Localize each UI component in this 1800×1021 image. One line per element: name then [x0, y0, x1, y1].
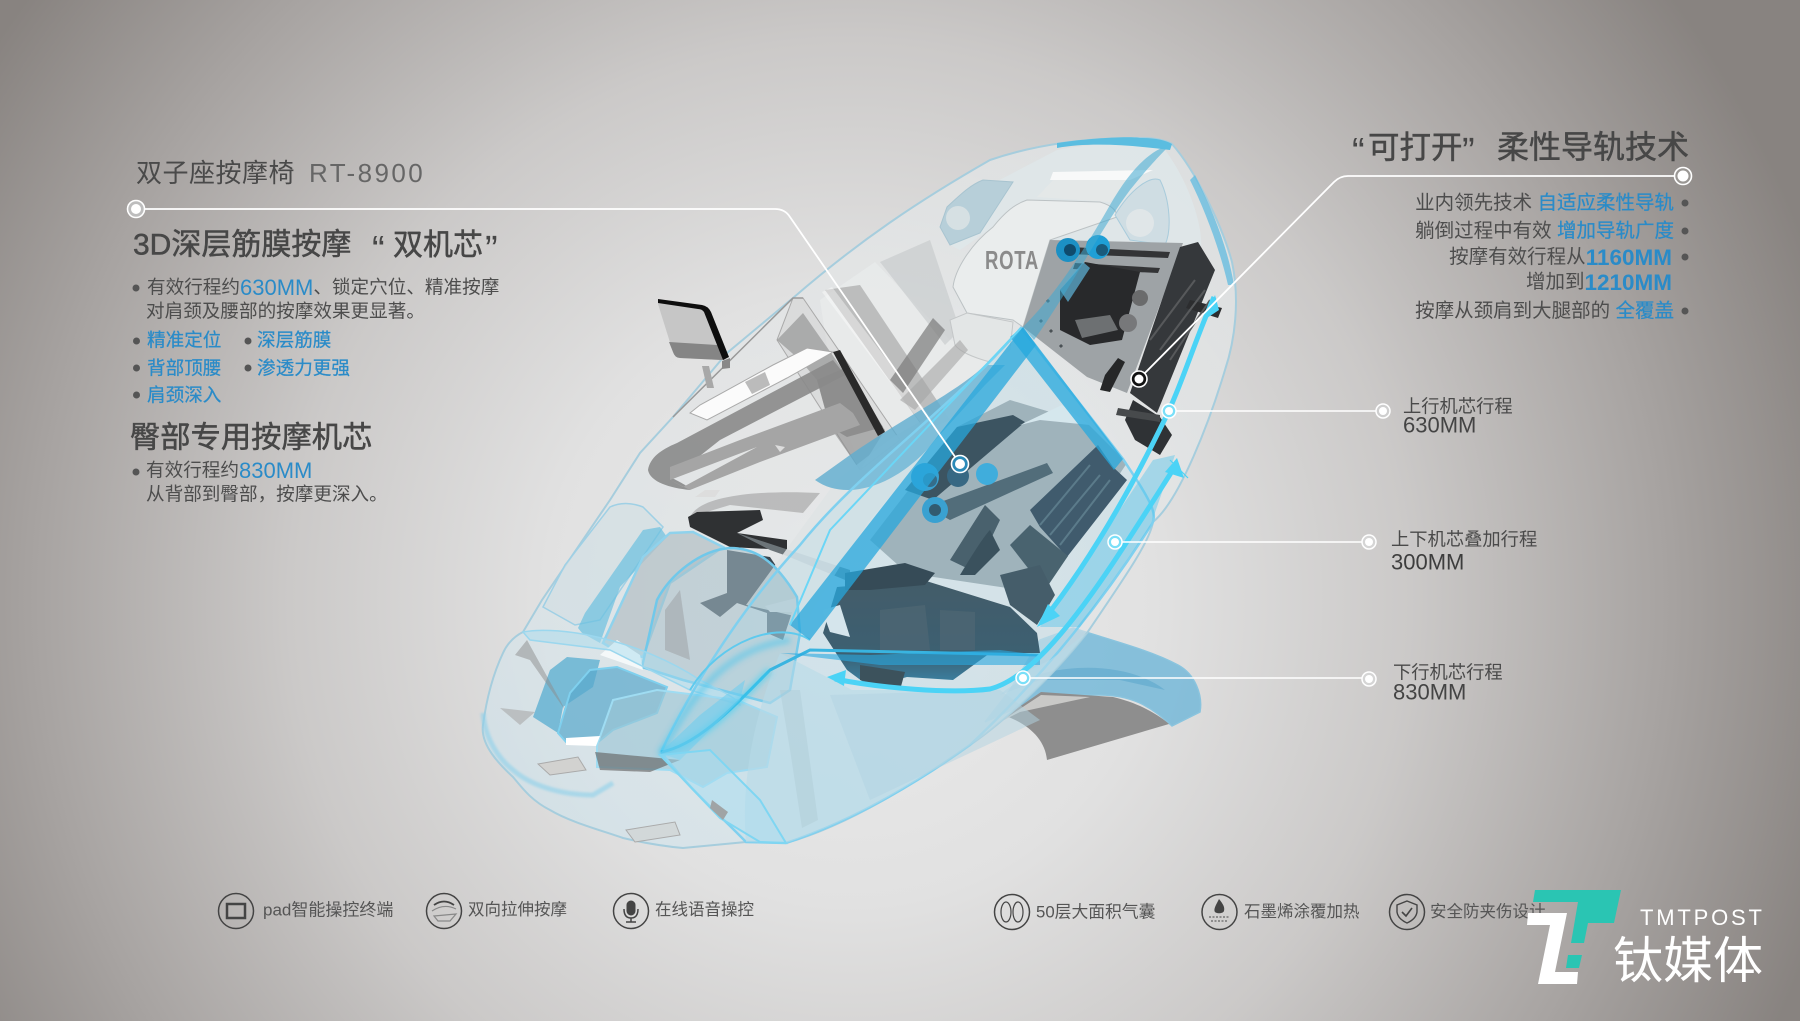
hip core description: 从背部到臀部，按摩更深入。 [146, 484, 388, 504]
right text block: rail features [1415, 192, 1688, 322]
ROTA logo on headrest: ROTA [985, 245, 1039, 275]
right heading: ” [1462, 131, 1475, 173]
massage chair illustration [483, 137, 1236, 848]
right heading [1352, 129, 1689, 173]
feature tags: 背部顶腰 [147, 358, 221, 378]
upper massage heads [1056, 235, 1110, 302]
feature: stretching [426, 894, 567, 928]
callout: overlap travel 300MM [1391, 528, 1537, 574]
icon: microphone [614, 894, 648, 928]
upper massage mechanism [1023, 240, 1222, 455]
seat frame and leg mechanism [688, 492, 850, 640]
icon: stretch chair [426, 894, 462, 928]
feature: graphene heating: 石墨烯涂覆加热 [1244, 902, 1360, 921]
feature tags: 肩颈深入 [147, 384, 221, 406]
watermark logo: 钛媒体 [1613, 933, 1763, 989]
feature tags: 精准定位 [147, 330, 221, 350]
feature tags: 深层筋膜 [257, 330, 331, 350]
feature: voice control [614, 894, 754, 928]
dual core description [132, 274, 499, 322]
left text block: dual core [132, 228, 499, 406]
blue cushion band [815, 365, 1005, 490]
icon: tablet [218, 894, 254, 928]
headrest area [940, 143, 1201, 362]
rear translucent side band [1040, 455, 1175, 627]
lower massage heads [911, 463, 998, 523]
backrest [820, 240, 1020, 465]
outer transparent shell [483, 138, 1236, 848]
left text block: hip core [130, 420, 388, 504]
foot rest cushions [483, 630, 818, 842]
calf rest cushions [543, 504, 800, 703]
leader line: flexible rail [1139, 176, 1683, 379]
left product title: 双子座按摩椅 [136, 158, 295, 188]
right text block: rail features: 业内领先技术 自适应柔性导轨 [1415, 192, 1674, 214]
callout: upper travel 630MM: 上行机芯行程 [1403, 396, 1513, 416]
icon: shield [1390, 894, 1424, 930]
heading: dual core: 双机芯 [393, 228, 483, 262]
callout: overlap travel 300MM: 300MM [1391, 550, 1464, 574]
callout: lower travel 830MM [1393, 662, 1503, 704]
travel arrows [827, 295, 1219, 691]
left product title: RT-8900 [309, 158, 425, 188]
feature: airbags: 50层大面积气囊 [1036, 902, 1156, 922]
callout: upper travel 630MM [1403, 396, 1513, 438]
heading: dual core [133, 228, 498, 271]
tablet screen [658, 299, 730, 388]
right heading: 柔性导轨技术 [1497, 129, 1689, 165]
right text block: rail features: 按摩从颈肩到大腿部的 全覆盖 [1415, 300, 1674, 322]
right text block: rail features: 增加到1210MM [1526, 270, 1672, 294]
base rocker [985, 628, 1201, 760]
callout: lower travel 830MM: 下行机芯行程 [1393, 662, 1503, 682]
right text block: rail features: 躺倒过程中有效 增加导轨广度 [1415, 220, 1674, 242]
feature: pad control [218, 894, 393, 928]
blue frame bands around mechanism [780, 137, 1234, 665]
lower massage mechanism [822, 400, 1127, 690]
callout: lower travel 830MM: 830MM [1393, 680, 1466, 704]
dual core description: 对肩颈及腰部的按摩效果更显著。 [146, 300, 425, 322]
feature tags [133, 330, 350, 406]
leader lines: travel [1023, 411, 1383, 678]
logo mark [1527, 890, 1621, 984]
markers [128, 168, 1692, 686]
right heading: 可打开 [1368, 129, 1463, 165]
feature: voice control: 在线语音操控 [655, 900, 754, 919]
hip core description [132, 458, 388, 504]
armrest and backrest frame [648, 285, 968, 497]
feature: stretching: 双向拉伸按摩 [468, 900, 567, 919]
watermark logo: TMTPOST [1640, 905, 1762, 930]
feature: safety: 安全防夹伤设计 [1430, 902, 1546, 921]
feature: graphene heating [1202, 894, 1360, 930]
feature: pad control: pad智能操控终端 [263, 900, 393, 920]
heading: dual core: 3D深层筋膜按摩 [133, 228, 351, 262]
right heading: “ [1352, 131, 1365, 173]
front side panel [660, 328, 1154, 843]
icon: flame [1202, 894, 1237, 930]
watermark logo [1527, 890, 1763, 989]
heading: dual core: “ [372, 229, 385, 271]
hip core description: 有效行程约830MM [146, 458, 312, 482]
icon: airbags [994, 894, 1030, 930]
seat cushion [746, 340, 1023, 619]
right text block: rail features: 按摩有效行程从1160MM [1449, 244, 1672, 270]
dual core description: 有效行程约630MM、锁定穴位、精准按摩 [147, 274, 499, 300]
feature: airbags [994, 894, 1156, 930]
leader line: dual core [136, 209, 960, 464]
heading: hip core: 臀部专用按摩机芯 [130, 420, 372, 454]
callout: upper travel 630MM: 630MM [1403, 412, 1476, 438]
feature: safety [1390, 894, 1546, 930]
feature tags: 渗透力更强 [257, 358, 350, 378]
heading: dual core: ” [485, 229, 498, 271]
callout: overlap travel 300MM: 上下机芯叠加行程 [1391, 528, 1537, 550]
